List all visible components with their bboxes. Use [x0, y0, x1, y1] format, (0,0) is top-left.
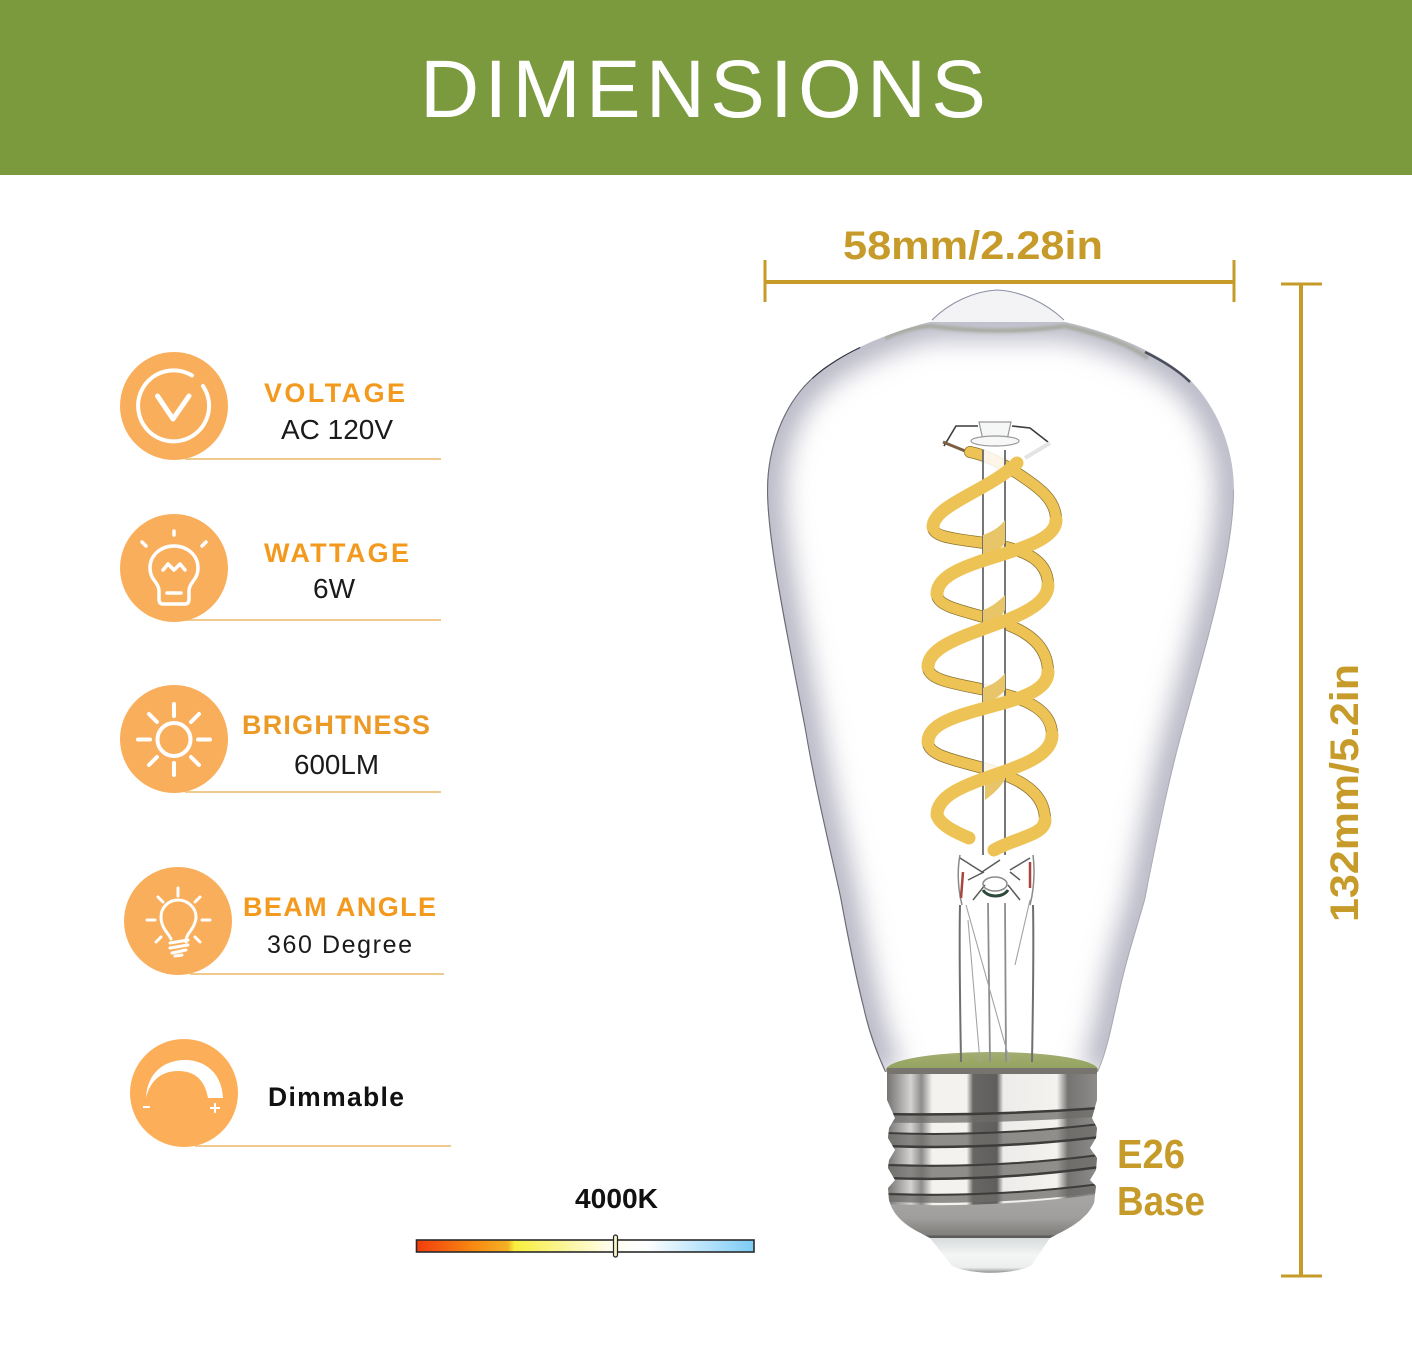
spec: voltage — [120, 352, 441, 460]
color temperature scale — [416, 1183, 754, 1257]
stem glass — [958, 855, 1034, 1062]
label: wattage: WATTAGE — [264, 538, 409, 568]
gradient bar — [416, 1240, 754, 1252]
green seal — [886, 1052, 1098, 1072]
value: 6W: 6W — [313, 573, 356, 604]
title: DIMENSIONS — [420, 44, 986, 135]
label: brightness: BRIGHTNESS — [242, 710, 430, 740]
slider marker — [614, 1235, 618, 1257]
glass dome tip — [930, 290, 1066, 330]
base label: E26 — [1117, 1131, 1185, 1177]
metal screw base — [885, 1065, 1100, 1273]
icon: dimmer — [130, 1039, 238, 1147]
icon: voltage — [120, 352, 228, 460]
icon: bulb with rays — [124, 867, 232, 975]
value: AC 120V: AC 120V — [281, 414, 393, 445]
label: 4000K: 4000K — [575, 1183, 658, 1214]
width dimension — [765, 224, 1234, 302]
icon: light bulb — [120, 514, 228, 622]
filament support top — [943, 422, 1050, 458]
filament front strands — [928, 463, 1056, 850]
header banner — [0, 0, 1412, 175]
spec: brightness — [120, 685, 441, 793]
central rod — [983, 450, 1005, 855]
label: width: 58mm/2.28in — [843, 224, 1103, 268]
spec: dimmable — [130, 1039, 451, 1147]
value: 360 Degree: 360 Degree — [267, 931, 412, 959]
height dimension — [1281, 284, 1367, 1276]
base label — [1117, 1131, 1205, 1224]
glass contact tip — [930, 1238, 1050, 1273]
glass envelope — [760, 315, 1240, 1088]
spec: beam angle — [124, 867, 444, 975]
label: voltage: VOLTAGE — [264, 378, 405, 408]
label: height: 132mm/5.2in — [1323, 664, 1367, 922]
spec: wattage — [120, 514, 441, 622]
filament back strands — [928, 452, 1056, 820]
label: beam angle: BEAM ANGLE — [243, 892, 436, 922]
icon: sun — [120, 685, 228, 793]
light bulb illustration — [760, 290, 1240, 1273]
label: dimmable: Dimmable — [268, 1082, 404, 1112]
base label: Base — [1117, 1178, 1205, 1224]
value: 600LM: 600LM — [294, 749, 379, 780]
